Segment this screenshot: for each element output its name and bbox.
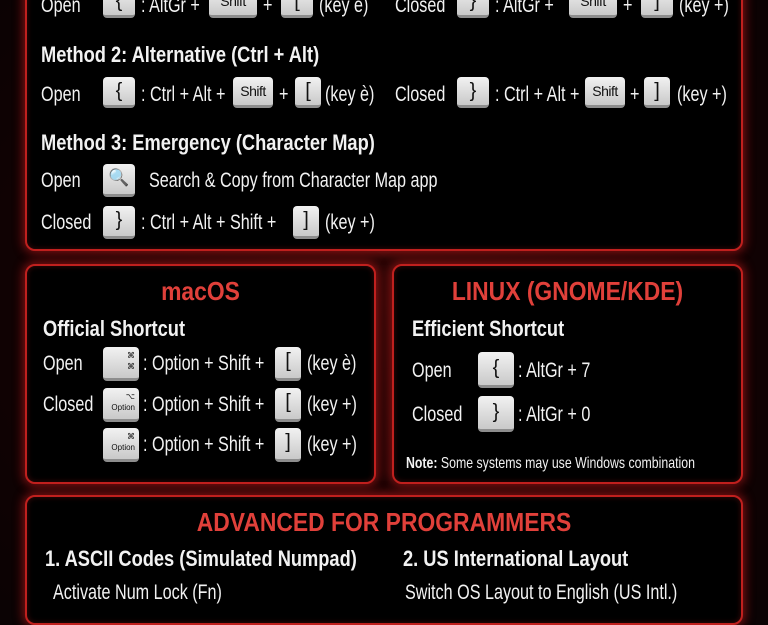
heading: method 3: Method 3: Emergency (Character Map) [41, 130, 375, 155]
row: method 2: { [116, 80, 122, 102]
subheading: official shortcut: Official Shortcut [43, 316, 185, 341]
row: open: : AltGr + 7 [518, 359, 590, 382]
row: method 2: Open [41, 83, 81, 106]
row: closed [412, 396, 590, 432]
subheading: us intl: 2. US International Layout [403, 546, 628, 571]
row: open: [ [285, 350, 291, 372]
row: character map closed [41, 206, 375, 239]
row: character map open: 🔍 [108, 168, 130, 187]
row: closed: Closed [412, 403, 462, 426]
row: method 2: + [279, 83, 288, 106]
row: method 2: + [630, 83, 639, 106]
row: closed alt: Option [111, 443, 135, 452]
row: closed [43, 388, 357, 422]
row: character map open [41, 164, 437, 197]
row: character map closed: } [116, 209, 122, 231]
row: method 2: Shift [240, 83, 266, 99]
row: method 2: (key è) [325, 83, 374, 106]
panel: windows [25, 0, 743, 251]
row: method 2: } [470, 80, 476, 102]
panel: macOS [25, 264, 376, 484]
row: open: { [493, 357, 499, 379]
row: character map open: Search & Copy from Character Map app [149, 169, 437, 192]
row: character map closed: ] [303, 209, 309, 231]
row: closed: : AltGr + 0 [518, 403, 590, 426]
row: method 2: Shift [592, 83, 618, 99]
row: open: ⌘ [127, 362, 135, 371]
row: closed alt [103, 428, 357, 462]
panel: linux [392, 264, 743, 484]
heading: linux: LINUX (GNOME/KDE) [452, 276, 683, 306]
row: character map open: Open [41, 169, 81, 192]
row: closed: Closed [43, 393, 93, 416]
heading: advanced: ADVANCED FOR PROGRAMMERS [197, 507, 571, 537]
row: character map closed: : Ctrl + Alt + Shift + [141, 211, 276, 234]
heading: macOS: macOS [161, 276, 240, 306]
row: closed: Option [111, 403, 135, 412]
subheading: efficient shortcut: Efficient Shortcut [412, 316, 564, 341]
text: num lock: Activate Num Lock (Fn) [53, 581, 222, 604]
note: Note: Some systems may use Windows combination [406, 455, 695, 472]
subheading: ascii: 1. ASCII Codes (Simulated Numpad) [45, 546, 357, 571]
row: closed alt: ] [285, 431, 291, 453]
row: method 2: (key +) [677, 83, 727, 106]
row: open: Open [412, 359, 452, 382]
row: open: Open [43, 352, 83, 375]
heading: method 2: Method 2: Alternative (Ctrl + Alt) [41, 42, 319, 67]
row: closed alt: ⌘ [127, 432, 135, 441]
row: open [412, 352, 590, 388]
row: open: : Option + Shift + [143, 352, 264, 375]
row: method 2: ] [654, 80, 660, 102]
row: closed alt: : Option + Shift + [143, 433, 264, 456]
row: open [43, 347, 356, 381]
row: method 1 [41, 0, 729, 18]
row: closed: ⌥ [126, 392, 135, 401]
text: switch layout: Switch OS Layout to English (US Intl.) [405, 581, 677, 604]
row: closed: (key +) [307, 393, 357, 416]
row: closed: [ [285, 391, 291, 413]
row: character map closed: Closed [41, 211, 91, 234]
row: method 2: : Ctrl + Alt + [495, 83, 579, 106]
row: character map closed: (key +) [325, 211, 375, 234]
row: closed: } [493, 401, 499, 423]
row: method 2: [ [305, 80, 311, 102]
row: closed: : Option + Shift + [143, 393, 264, 416]
row: open: ⌘ [127, 351, 135, 360]
row: method 2: Closed [395, 83, 445, 106]
row: method 2 [41, 77, 727, 108]
row: open: (key è) [307, 352, 356, 375]
panel: advanced [25, 495, 743, 625]
row: method 2: : Ctrl + Alt + [141, 83, 225, 106]
row: closed alt: (key +) [307, 433, 357, 456]
